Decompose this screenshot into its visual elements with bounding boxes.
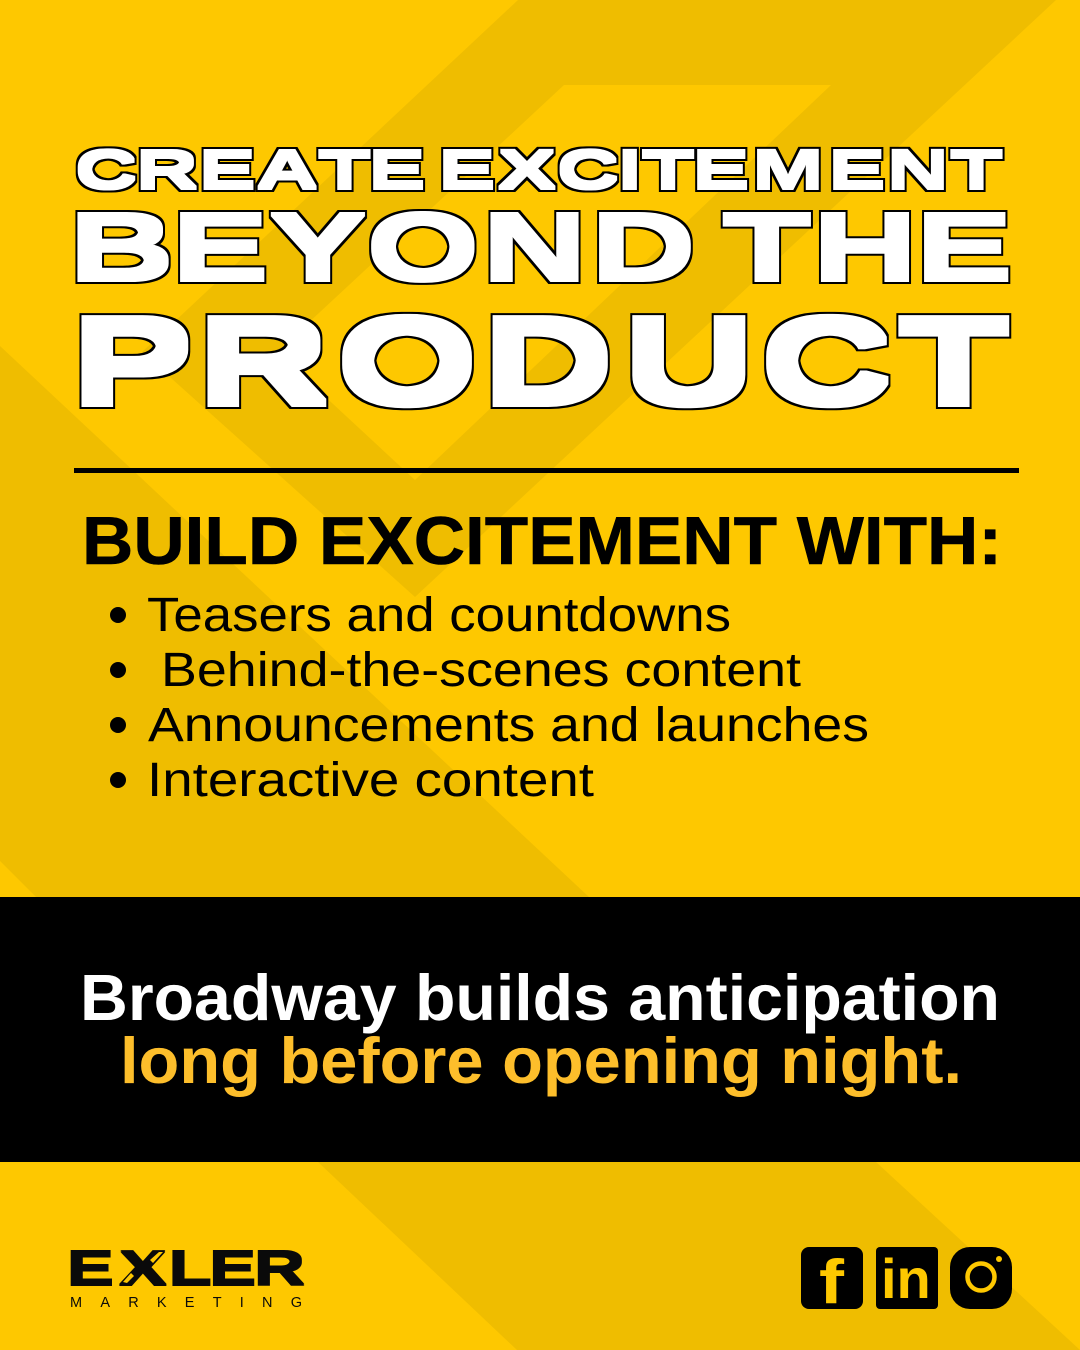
logo wordmark: EXLER bbox=[67, 1240, 305, 1296]
callout band bbox=[0, 897, 1080, 1162]
icon: facebook bbox=[801, 1247, 863, 1317]
social icons bbox=[801, 1247, 1012, 1317]
title bbox=[70, 140, 1012, 429]
bullet item: behind the scenes: Behind-the-scenes content bbox=[161, 644, 801, 697]
callout line 1: Broadway builds anticipation bbox=[80, 961, 1000, 1034]
bullet item: interactive: Interactive content bbox=[147, 754, 594, 807]
title line 1: CREATE EXCITEMENT bbox=[75, 140, 1002, 200]
divider rule bbox=[74, 468, 1019, 473]
bullet item: announcements: Announcements and launches bbox=[148, 699, 869, 752]
bullet list bbox=[110, 589, 869, 807]
title line 2: BEYOND THE bbox=[70, 193, 1012, 300]
icon: instagram bbox=[950, 1247, 1012, 1309]
subheading: BUILD EXCITEMENT WITH: bbox=[82, 503, 1002, 579]
icon: linkedin: in bbox=[881, 1247, 931, 1310]
icon: facebook: f bbox=[819, 1248, 844, 1317]
logo: Exler Marketing bbox=[67, 1240, 305, 1311]
logo tagline: MARKETING bbox=[70, 1295, 302, 1311]
title line 3: PRODUCT bbox=[73, 294, 1008, 429]
bullet item: teasers: Teasers and countdowns bbox=[147, 589, 731, 642]
callout line 2: long before opening night. bbox=[120, 1024, 962, 1097]
